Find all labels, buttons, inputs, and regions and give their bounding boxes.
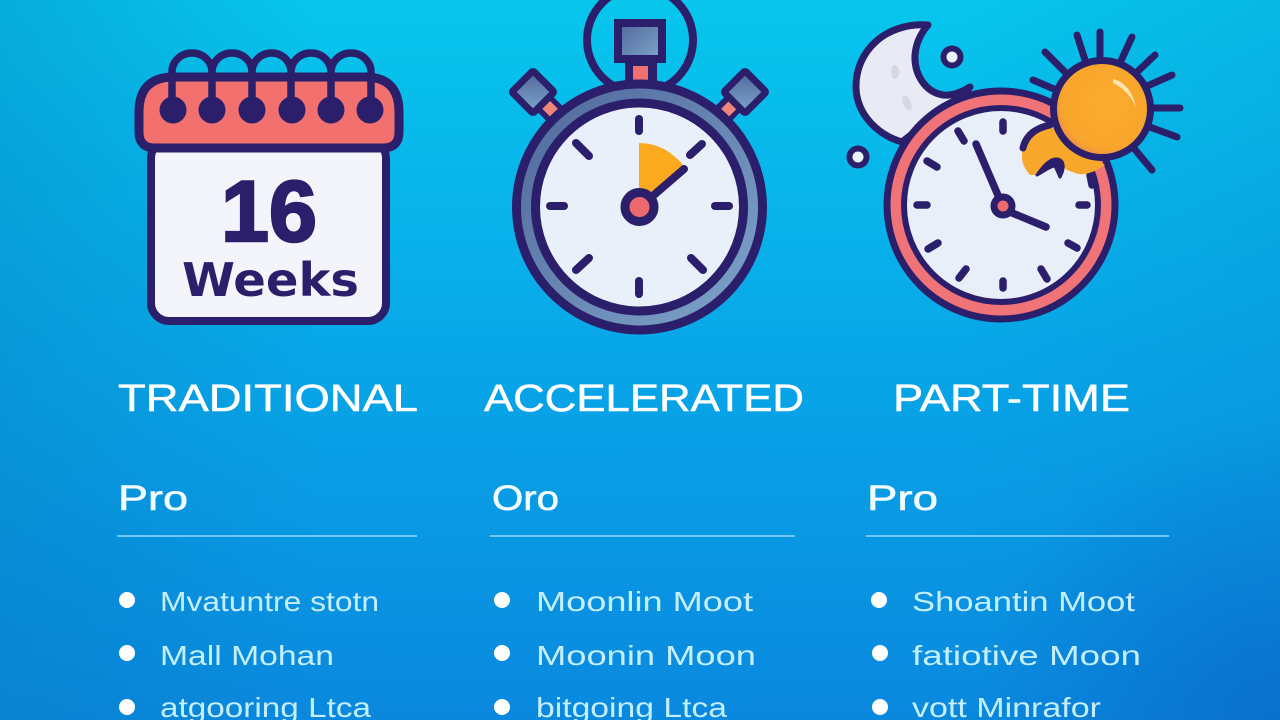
- clock face: [887, 91, 1115, 319]
- panel: accelerated pros: [490, 479, 795, 720]
- column heading: traditional: TRADITIONAL: [118, 378, 418, 420]
- panel: accelerated pros: Moonin Moon: [536, 640, 756, 671]
- icon: small star circles: [850, 48, 960, 166]
- icon: sun: [1033, 32, 1180, 170]
- icon: calendar showing 16 weeks: [139, 53, 399, 321]
- panel: traditional pros: [117, 479, 417, 720]
- icon: calendar showing 16 weeks: Weeks: [182, 253, 359, 307]
- panel: accelerated pros: Oro: [492, 479, 559, 518]
- panel: part-time pros: Shoantin Moot: [912, 586, 1135, 617]
- icon: clock with moon and sun: [850, 25, 1180, 319]
- panel: traditional pros: Pro: [118, 479, 188, 518]
- panel: accelerated pros: Moonlin Moot: [536, 586, 753, 617]
- icon: stopwatch: [512, 0, 766, 330]
- panel: traditional pros: Mall Mohan: [160, 640, 334, 671]
- icon: calendar showing 16 weeks: 16: [221, 164, 317, 260]
- column heading: part-time: PART-TIME: [893, 378, 1130, 420]
- panel: part-time pros: [866, 479, 1169, 720]
- panel: part-time pros: fatiotive Moon: [912, 640, 1141, 671]
- panel: part-time pros: Pro: [867, 479, 938, 518]
- stopwatch side button right: [712, 71, 766, 125]
- panel: traditional pros: Mvatuntre stotn: [160, 586, 379, 617]
- icon: crescent moon: [856, 25, 970, 142]
- sun flare: [1022, 125, 1105, 177]
- stopwatch side button left: [512, 71, 566, 125]
- column heading: accelerated: ACCELERATED: [484, 378, 804, 420]
